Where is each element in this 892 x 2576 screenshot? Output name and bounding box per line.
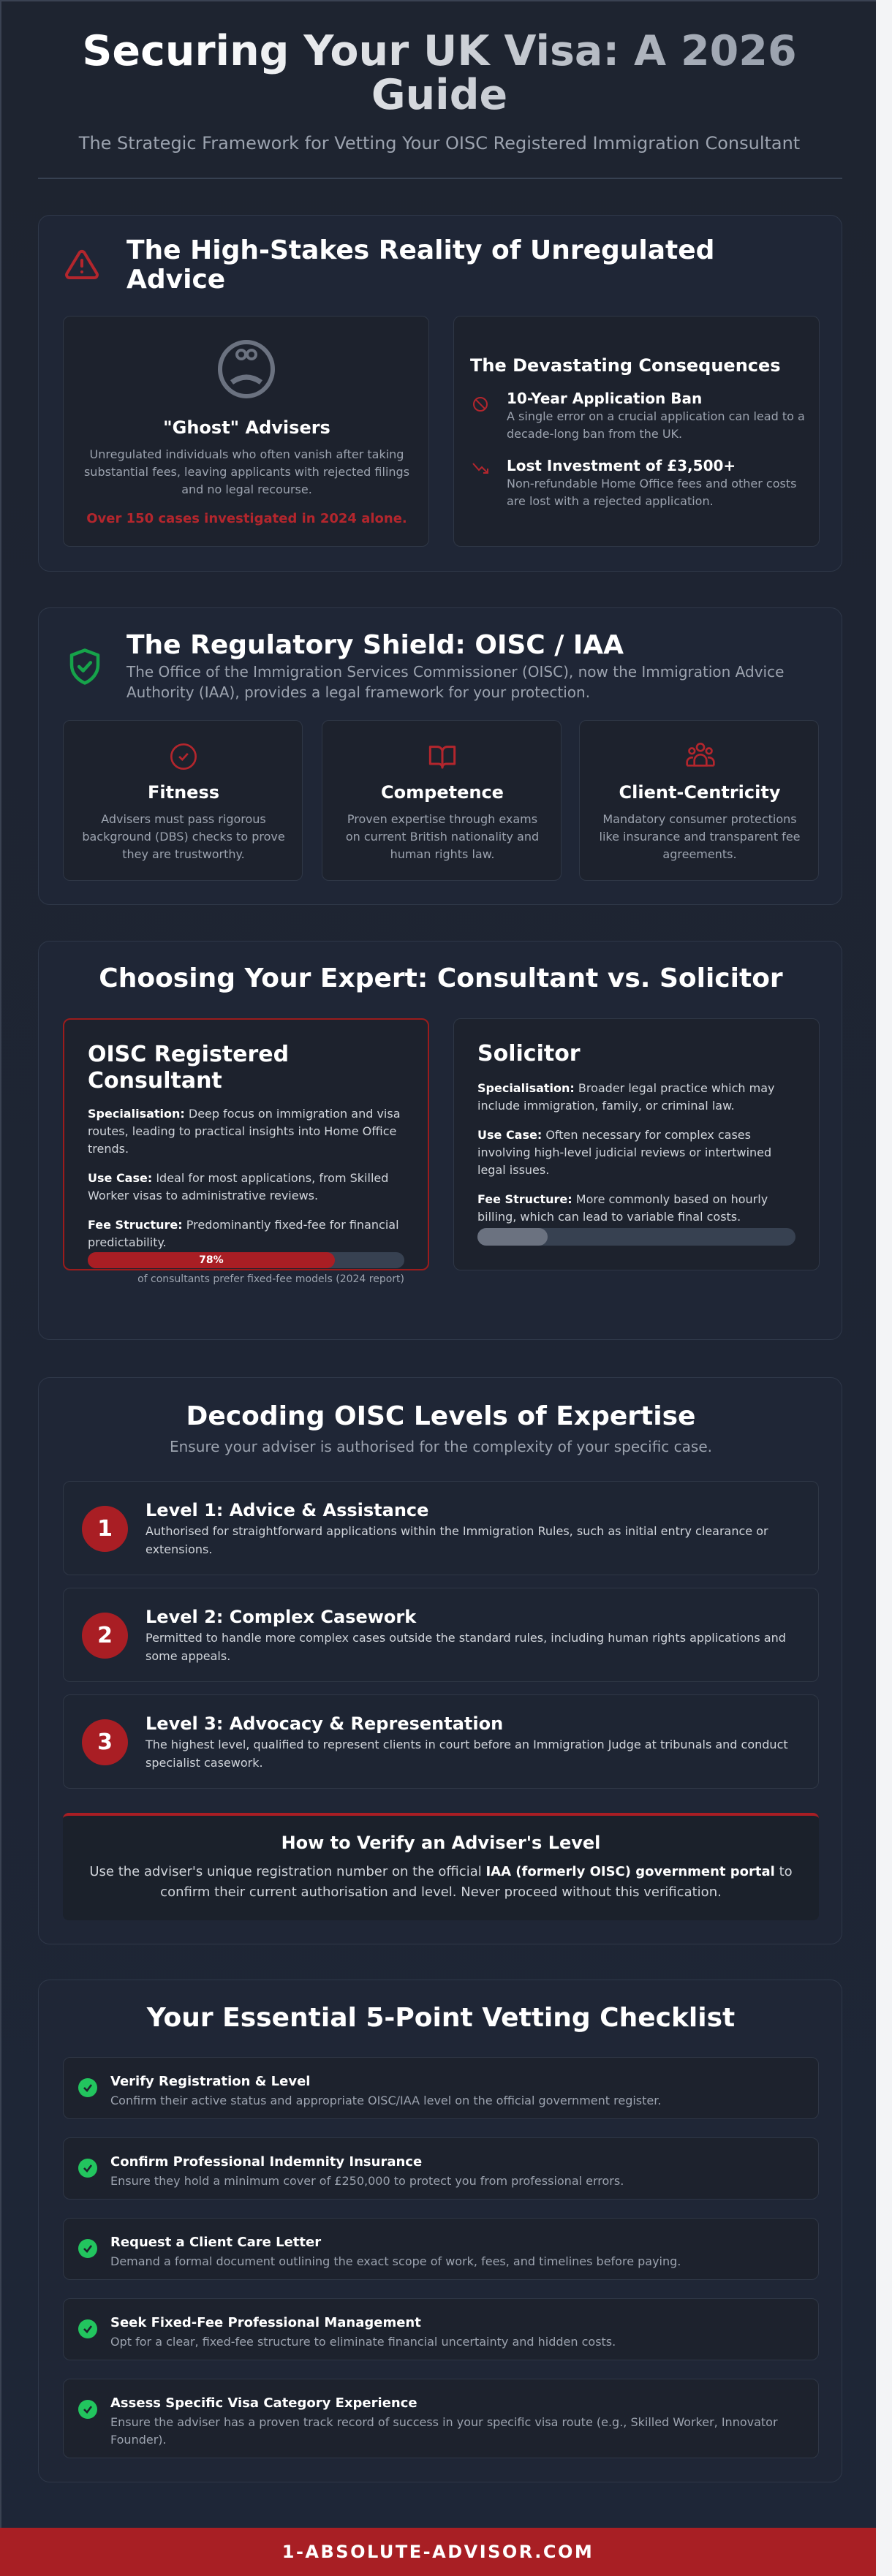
card: fitness [63, 720, 303, 881]
title: Guide [371, 71, 507, 119]
card: client-centricity [579, 720, 819, 881]
icon: shield [70, 648, 99, 685]
level 3: 3 [97, 1730, 113, 1755]
callout: verify level: Use the adviser's unique registration number on the official IAA (formerly OISC) government portal to confirm their current authorisation and level. Never proceed without this verification. [89, 1864, 793, 1900]
panel: high-stakes reality [38, 215, 842, 572]
card: competence: on current British nationality and [346, 830, 539, 844]
bar chart: 78%: 78% [199, 1254, 224, 1266]
title: Securing Your UK Visa: A 2026 [82, 27, 797, 75]
card: competence: Proven expertise through exams [347, 812, 537, 826]
panel: OISC levels [38, 1377, 842, 1944]
item: lost investment: Lost Investment of £3,500+ [507, 457, 736, 474]
checklist item 3 [63, 2218, 819, 2280]
card: solicitor: Specialisation: Broader legal practice which may include immigration, family, or criminal law. [477, 1081, 774, 1113]
item: ban: 10-Year Application Ban [507, 390, 702, 407]
stat: Over 150 cases investigated in 2024 alone. [86, 511, 407, 526]
card: OISC consultant: OISC Registered [88, 1042, 289, 1067]
level 1 [63, 1481, 819, 1575]
card: consequences [453, 316, 820, 547]
callout: verify level: How to Verify an Adviser's Level [281, 1833, 600, 1853]
card: fitness: Fitness [148, 782, 219, 803]
card title: The Devastating Consequences [470, 355, 781, 376]
title [1, 29, 877, 117]
icon: sad face [218, 340, 275, 398]
checklist item 4: Opt for a clear, fixed-fee structure to eliminate financial uncertainty and hidden costs. [110, 2335, 616, 2349]
panel: checklist [38, 1980, 842, 2482]
item: lost investment [472, 457, 796, 508]
checklist item 5: Ensure the adviser has a proven track record of success in your specific visa route (e.g., Skilled Worker, Innovator Founder). [110, 2415, 778, 2447]
card: OISC consultant: Specialisation: Deep focus on immigration and visa routes, leading to practical insights into Home Office trends. [88, 1107, 401, 1156]
card: client-centricity: like insurance and transparent fee [600, 830, 800, 844]
checklist item 1: Verify Registration & Level [110, 2074, 310, 2089]
card: competence: human rights law. [390, 847, 494, 861]
bar chart: 78% [88, 1252, 404, 1268]
card: OISC consultant: Fee Structure: Predominantly fixed-fee for financial predictability. [88, 1218, 399, 1249]
level 3: The highest level, qualified to represent clients in court before an Immigration Judge at tribunals and conduct specialist casework. [145, 1738, 788, 1769]
card: solicitor: Use Case: Often necessary for complex cases involving high-level judicial reviews or intertwined legal issues. [477, 1128, 771, 1177]
card: fitness: background (DBS) checks to prove [82, 830, 285, 844]
panel: consultant vs solicitor [38, 941, 842, 1340]
heading: The High-Stakes Reality of Unregulated Advice [126, 235, 714, 295]
panel: regulatory shield [38, 607, 842, 905]
card: client-centricity: Client-Centricity [619, 782, 780, 803]
level 2: Permitted to handle more complex cases outside the standard rules, including human rights applications and some appeals. [145, 1631, 786, 1662]
level 1: 1 [97, 1516, 113, 1542]
callout: verify level [63, 1813, 819, 1920]
card text: Unregulated individuals who often vanish after taking substantial fees, leaving applicants with rejected filings and no legal recourse. [84, 447, 409, 496]
item: ban [473, 390, 805, 441]
checklist item 5 [63, 2379, 819, 2458]
card: client-centricity: Mandatory consumer protections [602, 812, 797, 826]
item: ban: A single error on a crucial application can lead to a decade-long ban from the UK. [507, 409, 805, 441]
heading: Choosing Your Expert: Consultant vs. Solicitor [99, 963, 783, 993]
level 2: Level 2: Complex Casework [145, 1607, 416, 1627]
card: solicitor [453, 1018, 820, 1270]
card: solicitor: Fee Structure: More commonly based on hourly billing, which can lead to variable final costs. [477, 1192, 768, 1224]
checklist item 1 [63, 2057, 819, 2119]
card: competence [322, 720, 562, 881]
card: solicitor: Solicitor [477, 1041, 581, 1067]
subtitle: The Strategic Framework for Vetting Your OISC Registered Immigration Consultant [79, 133, 800, 154]
level 2 [63, 1588, 819, 1682]
bar chart: hourly [477, 1228, 795, 1246]
description: The Office of the Immigration Services Commissioner (OISC), now the Immigration Advice Authority (IAA), provides a legal framework for your protection. [126, 663, 784, 701]
card: OISC consultant [63, 1018, 429, 1270]
card: ghost advisers [63, 316, 429, 547]
checklist item 3: Request a Client Care Letter [110, 2235, 321, 2250]
heading: Decoding OISC Levels of Expertise [186, 1401, 695, 1431]
checklist item 4 [63, 2298, 819, 2360]
card: OISC consultant: Use Case: Ideal for most applications, from Skilled Worker visas to administrative reviews. [88, 1171, 388, 1202]
icon: warning [65, 250, 99, 279]
footer [0, 2528, 876, 2576]
checklist item 3: Demand a formal document outlining the exact scope of work, fees, and timelines before paying. [110, 2254, 681, 2268]
checklist item 2: Confirm Professional Indemnity Insurance [110, 2154, 422, 2170]
card: fitness: Advisers must pass rigorous [101, 812, 266, 826]
card: OISC consultant: Consultant [88, 1068, 222, 1094]
checklist item 4: Seek Fixed-Fee Professional Management [110, 2315, 421, 2330]
level 3 [63, 1694, 819, 1789]
item: lost investment: Non-refundable Home Office fees and other costs are lost with a rejected application. [507, 477, 796, 508]
level 3: Level 3: Advocacy & Representation [145, 1713, 503, 1734]
card: competence: Competence [381, 782, 504, 803]
checklist item 1: Confirm their active status and appropriate OISC/IAA level on the official government register. [110, 2094, 661, 2107]
card: fitness: they are trustworthy. [122, 847, 245, 861]
checklist item 2: Ensure they hold a minimum cover of £250,000 to protect you from professional errors. [110, 2174, 624, 2188]
card title: "Ghost" Advisers [163, 417, 330, 438]
card: client-centricity: agreements. [662, 847, 737, 861]
level 1: Level 1: Advice & Assistance [145, 1500, 428, 1520]
checklist item 2 [63, 2137, 819, 2200]
heading: Your Essential 5-Point Vetting Checklist [147, 2003, 735, 2033]
panel: consultant vs solicitor: of consultants prefer fixed-fee models (2024 report) [137, 1273, 404, 1285]
heading: The Regulatory Shield: OISC / IAA [126, 630, 624, 660]
subtitle: Ensure your adviser is authorised for the complexity of your specific case. [170, 1438, 712, 1455]
level 2: 2 [97, 1623, 113, 1648]
checklist item 5: Assess Specific Visa Category Experience [110, 2395, 417, 2411]
level 1: Authorised for straightforward applications within the Immigration Rules, such as initial entry clearance or extensions. [145, 1524, 768, 1556]
footer: 1-ABSOLUTE-ADVISOR.COM [282, 2542, 594, 2562]
